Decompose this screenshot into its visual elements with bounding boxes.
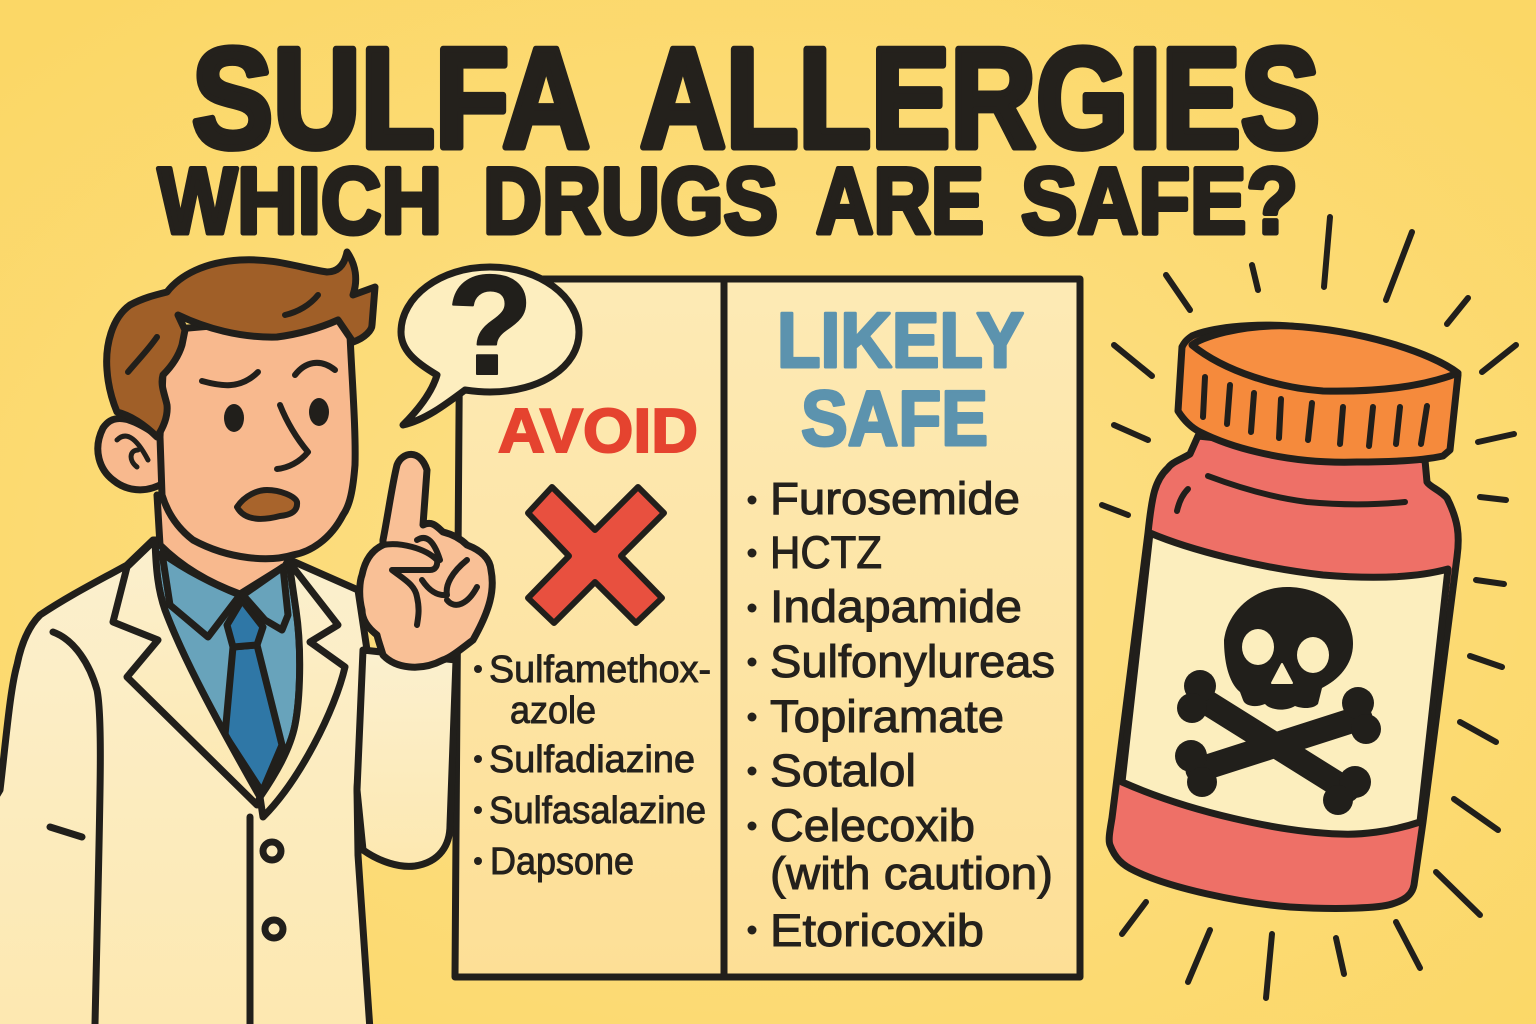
- character: doctor: [0, 252, 492, 1024]
- bottle highlights: [1177, 476, 1405, 511]
- hand and raised finger: [360, 454, 492, 667]
- radiating danger lines: [1102, 217, 1516, 998]
- title line 2: SAFE?: [1021, 148, 1298, 253]
- safe list: Furosemide: [770, 473, 1020, 524]
- title line 2: ARE: [816, 148, 984, 253]
- eyebrows: [202, 363, 335, 385]
- coat buttons: [263, 842, 283, 938]
- avoid list: Sulfadiazine: [489, 739, 695, 781]
- panel: drug table: [455, 279, 1080, 977]
- face: [160, 315, 355, 559]
- cap: [1178, 325, 1458, 462]
- avoid list: azole: [510, 690, 596, 732]
- cap ridges: [1203, 377, 1427, 446]
- icon: red cross: [528, 487, 664, 623]
- avoid list: [474, 649, 711, 883]
- neck: [157, 495, 300, 594]
- heading: likely safe: [777, 296, 1024, 462]
- tie: [225, 600, 282, 792]
- title: [158, 19, 1320, 253]
- safe list: [748, 473, 1055, 956]
- title line 1: [192, 19, 1320, 178]
- heading: avoid: AVOID: [498, 397, 698, 466]
- lab coat: [0, 540, 370, 1024]
- avoid list: Dapsone: [490, 841, 634, 883]
- safe list: Sulfonylureas: [770, 636, 1055, 687]
- cap top: [1192, 326, 1458, 391]
- hair highlights: [128, 295, 318, 372]
- icon: skull and crossbones: [1175, 587, 1381, 815]
- coat details: [50, 632, 250, 1024]
- speech bubble with question mark: ?: [447, 246, 533, 405]
- title line 1: ALLERGIES: [640, 19, 1320, 178]
- title line 2: WHICH: [158, 148, 442, 253]
- safe list: Topiramate: [770, 691, 1004, 742]
- safe list: Etoricoxib: [770, 905, 984, 956]
- mouth: [237, 490, 297, 519]
- heading: likely safe: LIKELY: [777, 296, 1024, 384]
- hair: [107, 252, 375, 437]
- sleeve: [357, 650, 456, 866]
- bottle label: [1122, 533, 1448, 834]
- poison bottle: [1109, 325, 1458, 908]
- speech bubble with question mark: [401, 246, 579, 425]
- avoid list: Sulfasalazine: [489, 790, 706, 832]
- collar: [162, 553, 288, 637]
- eyes: [224, 398, 329, 432]
- nose: [277, 405, 308, 469]
- title line 2: [158, 148, 1298, 253]
- shirt: [155, 540, 300, 797]
- safe list: HCTZ: [770, 527, 882, 578]
- safe list: Sotalol: [770, 745, 916, 796]
- lapels: [113, 540, 345, 817]
- safe list: (with caution): [770, 848, 1053, 899]
- safe list: Indapamide: [770, 581, 1022, 632]
- heading: likely safe: SAFE: [801, 374, 988, 462]
- title line 2: DRUGS: [483, 148, 778, 253]
- safe list: Celecoxib: [770, 800, 975, 851]
- avoid list: Sulfamethox-: [489, 649, 711, 691]
- ear: [98, 418, 165, 490]
- title line 1: SULFA: [192, 19, 590, 178]
- bottle body: [1109, 436, 1458, 908]
